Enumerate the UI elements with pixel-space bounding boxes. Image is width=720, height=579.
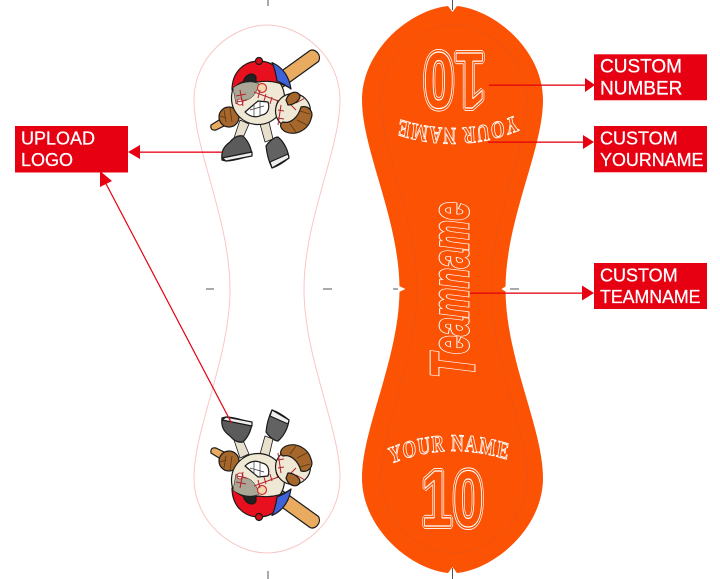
sleeve outline: [194, 25, 340, 553]
callout: custom number: CUSTOM: [600, 57, 682, 78]
callout: custom teamname: CUSTOM: [600, 265, 678, 285]
callout: custom teamname: [594, 263, 707, 309]
panel: blank white sleeve with logos: [194, 25, 340, 553]
callout: custom number: NUMBER: [600, 78, 682, 99]
team name script: eamname: [422, 202, 480, 354]
callout: custom yourname: [594, 126, 707, 172]
arrow: logo horizontal: [128, 145, 222, 159]
number 10 bottom: 10: [421, 454, 484, 543]
arrow: custom teamname: [470, 286, 594, 300]
your name top inverted: YOUR NAME: [398, 116, 520, 144]
callout: custom teamname: TEAMNAME: [600, 287, 700, 307]
callout: custom number: [594, 54, 707, 100]
arrow: custom yourname: [488, 135, 594, 149]
team name script: [419, 202, 488, 378]
number 10 top inverted: 10: [423, 36, 486, 125]
callout: custom yourname: CUSTOM: [600, 128, 678, 148]
icon: baseball mascot logo top: [211, 50, 319, 168]
number 10 bottom: 10: [421, 454, 484, 543]
team name script: eamname: [422, 202, 480, 354]
callout: custom yourname: YOURNAME: [600, 150, 704, 170]
team name script: T: [419, 351, 488, 378]
callout: upload logo: LOGO: [21, 150, 73, 170]
callout: upload logo: [15, 126, 128, 172]
arrow: logo diagonal: [100, 171, 232, 423]
inner seam line: [381, 25, 527, 553]
number 10 top inverted: 10: [423, 36, 486, 125]
your name bottom: YOUR NAME: [387, 434, 509, 464]
number 10 top inverted: 10: [423, 36, 486, 125]
icon: baseball mascot logo bottom: [211, 410, 319, 528]
panel: orange printed sleeve: [362, 6, 543, 573]
number 10 bottom: 10: [421, 454, 484, 543]
callout: upload logo: UPLOAD: [21, 128, 95, 148]
arrow: custom number: [489, 78, 595, 92]
orange sleeve shape: [362, 6, 543, 573]
team name script: T: [419, 351, 488, 378]
